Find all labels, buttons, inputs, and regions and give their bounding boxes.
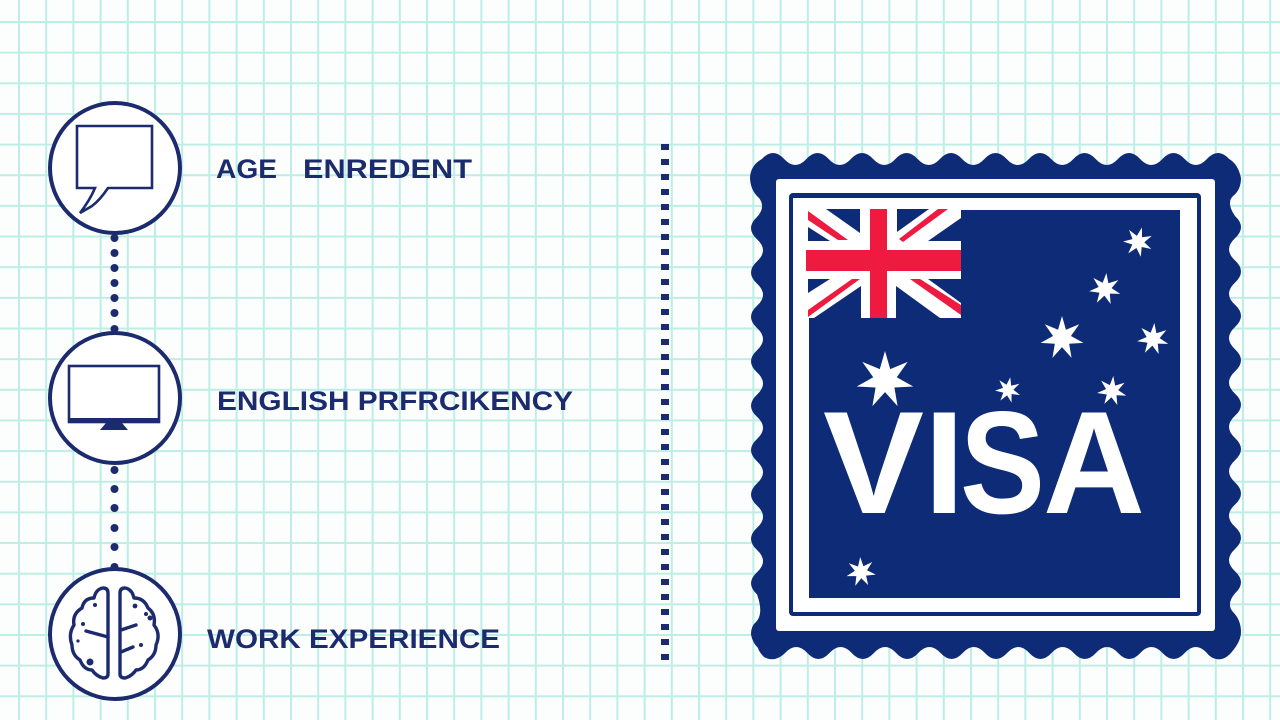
VISA wordmark: A	[1043, 381, 1145, 544]
VISA wordmark: V	[823, 381, 924, 544]
icon: brain in circle	[50, 569, 180, 699]
connector dots between second and third circle	[110, 466, 118, 571]
stamp inner white band	[793, 198, 1197, 612]
VISA wordmark: I	[924, 381, 965, 544]
icon: speech bubble in circle	[50, 103, 180, 233]
dotted vertical divider	[661, 144, 669, 661]
label: age: AGE	[216, 154, 277, 184]
label: english proficiency: ENGLISH PRFRCIKENCY	[217, 386, 573, 416]
left column: requirements list	[50, 103, 573, 699]
stamp scalloped navy edge	[750, 153, 1241, 659]
label: age	[216, 154, 473, 184]
label: work experience: WORK EXPERIENCE	[207, 624, 500, 654]
VISA wordmark	[823, 381, 1145, 544]
VISA wordmark: S	[960, 381, 1045, 544]
stamp outer white band	[776, 179, 1215, 631]
label: age: ENREDENT	[303, 154, 473, 184]
icon: monitor in circle	[50, 333, 180, 463]
union jack flag	[806, 209, 961, 318]
connector dots between first and second circle	[110, 234, 118, 333]
stamp blue field	[809, 210, 1180, 598]
stamp thin navy frame	[789, 193, 1201, 616]
southern cross stars	[846, 224, 1170, 586]
visa stamp	[750, 153, 1241, 659]
